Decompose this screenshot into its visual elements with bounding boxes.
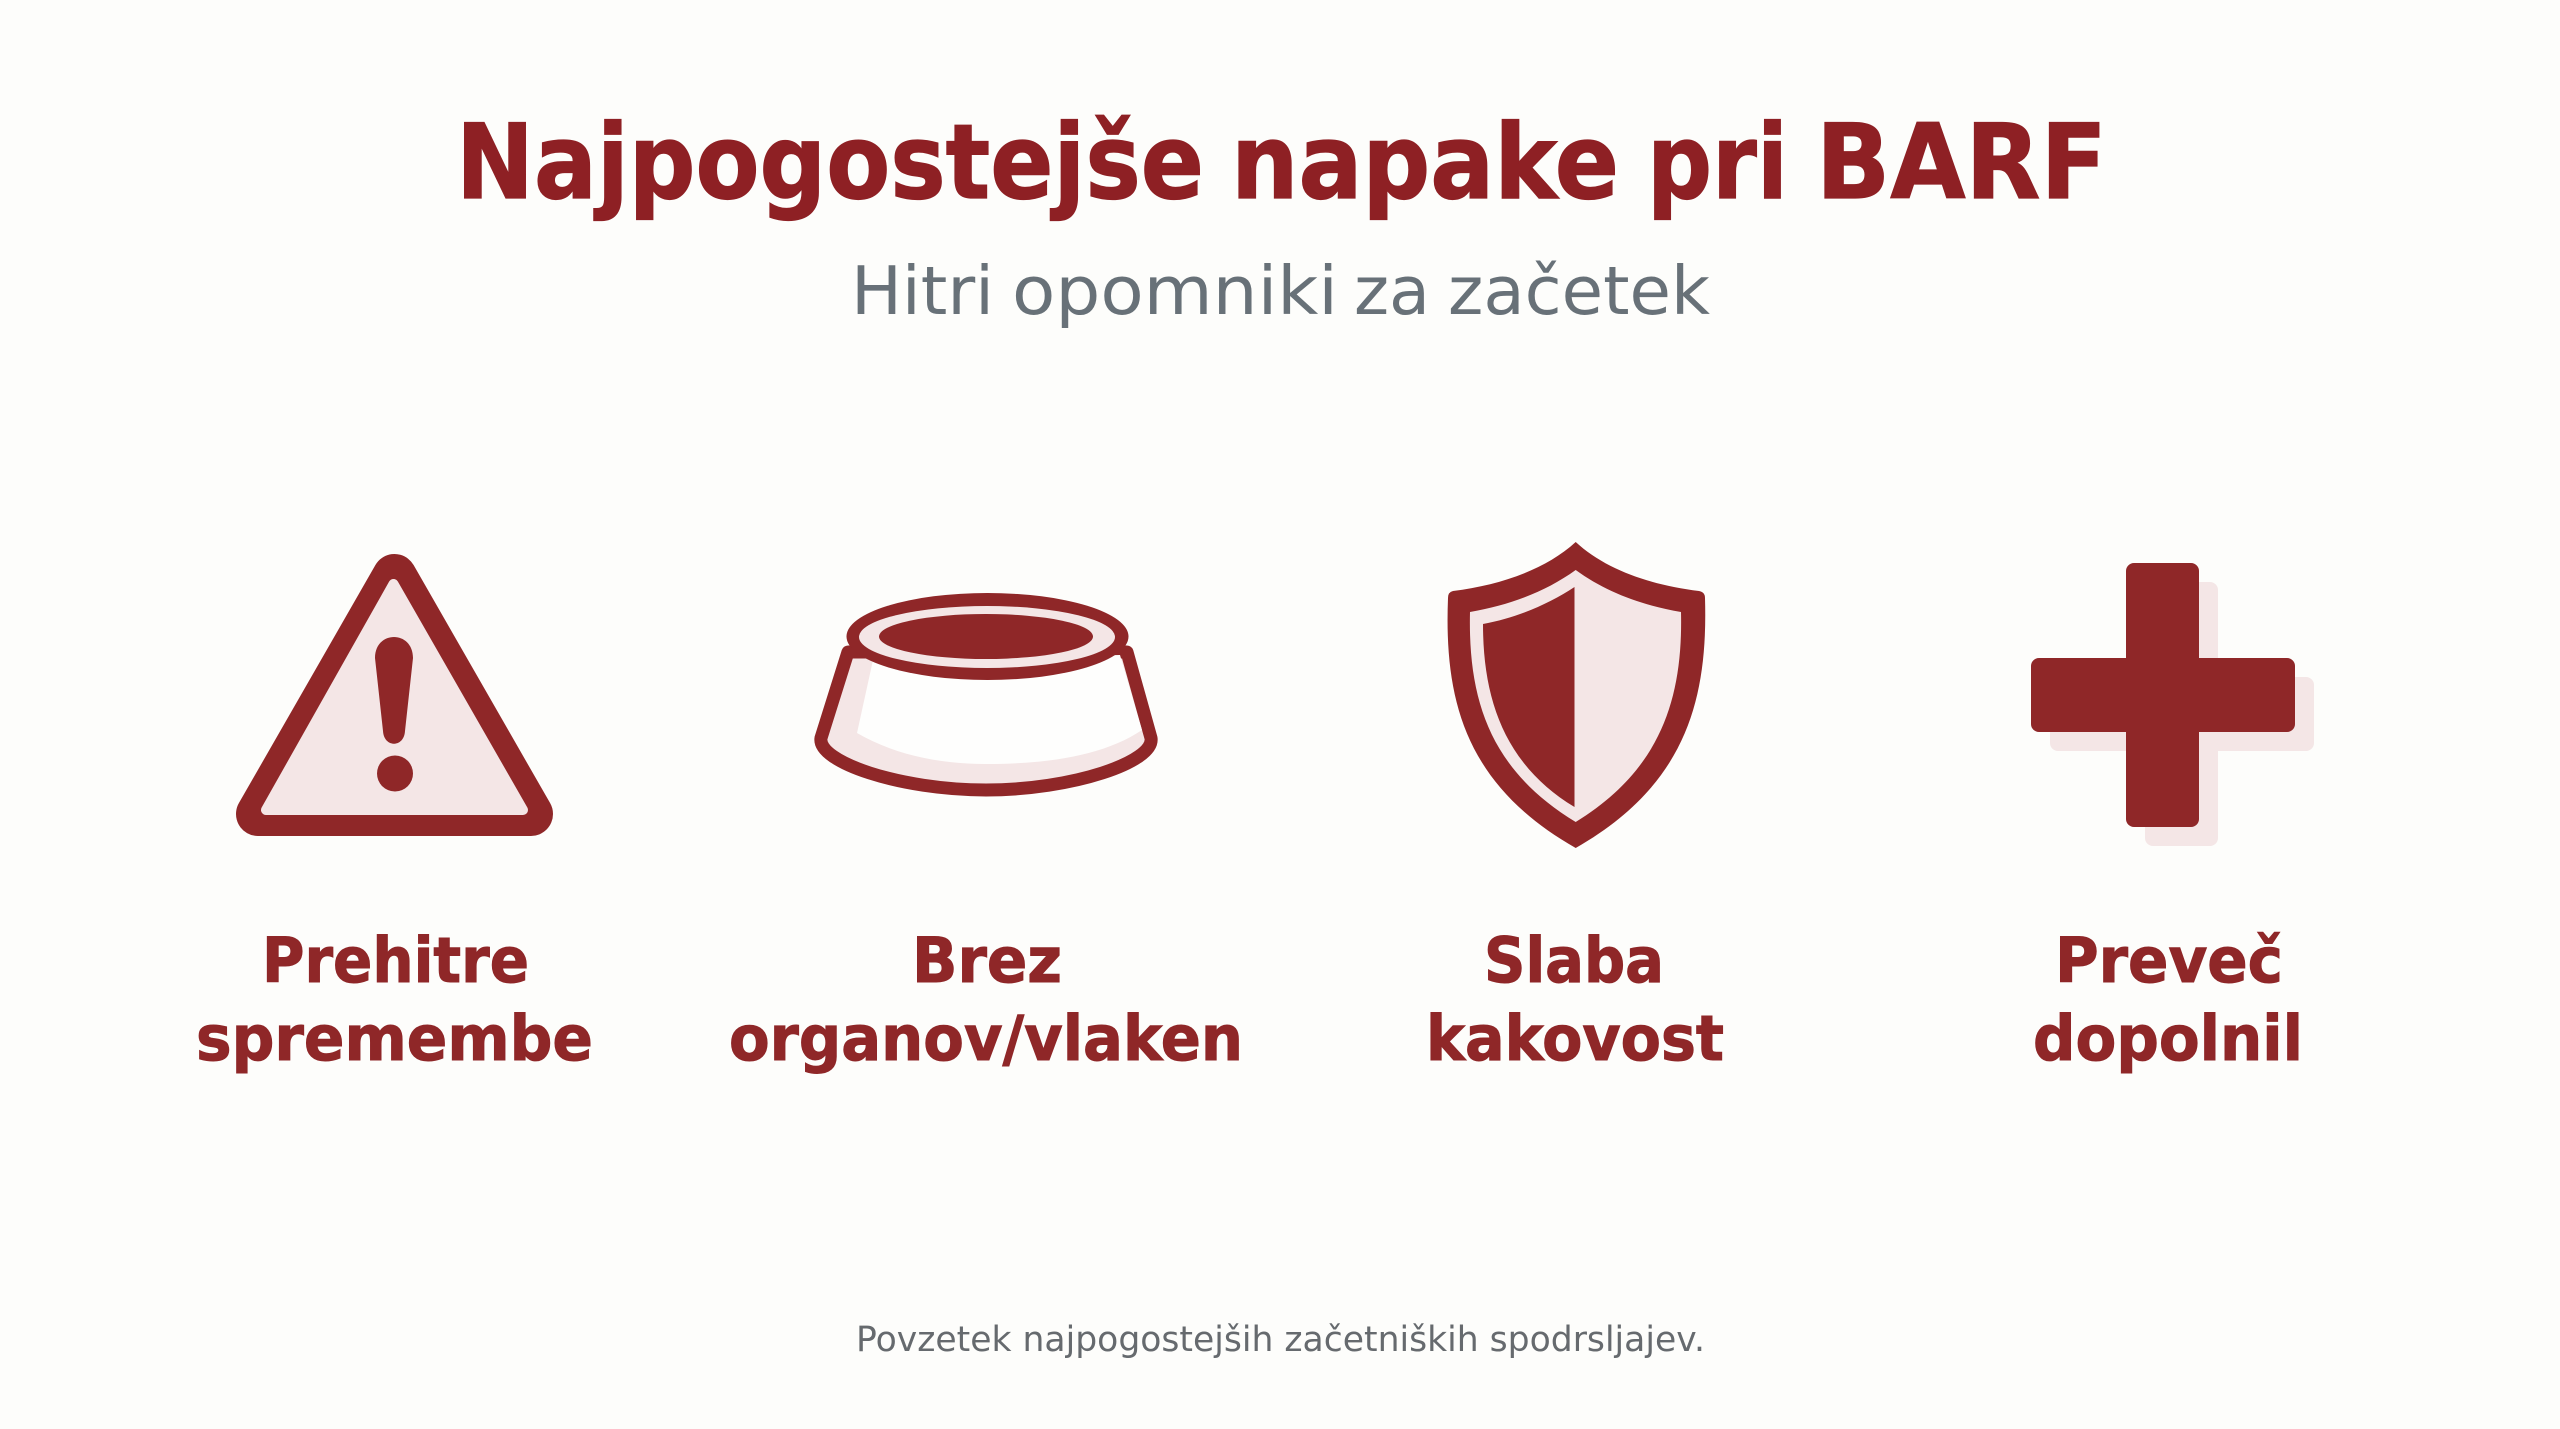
label: Slaba kakovost: kakovost <box>1426 1002 1724 1075</box>
subtitle: za <box>1354 252 1430 330</box>
label: Slaba kakovost: Slaba <box>1484 924 1664 997</box>
label: Brez organov/vlaken: Brez <box>912 924 1062 997</box>
subtitle: Hitri <box>851 252 994 330</box>
icon: warning triangle <box>258 576 531 814</box>
column: poor quality <box>1426 542 1724 1075</box>
title: napake <box>1231 103 1619 223</box>
column: no organs or fibre <box>729 593 1243 1075</box>
title <box>456 103 2107 223</box>
subtitle: začetek <box>1448 252 1710 330</box>
icon: medical cross <box>2031 563 2314 846</box>
icon: food bowl <box>821 593 1151 790</box>
label: Brez organov/vlaken: organov/vlaken <box>729 1002 1243 1075</box>
subtitle: opomniki <box>1012 252 1338 330</box>
label: Prehitre spremembe: Prehitre <box>262 924 529 997</box>
icon: shield <box>1448 542 1705 848</box>
label: Prehitre spremembe <box>196 924 593 1075</box>
label: Preveč dopolnil: dopolnil <box>2033 1002 2303 1075</box>
title: BARF <box>1816 103 2107 223</box>
label: Brez organov/vlaken <box>729 924 1243 1075</box>
subtitle <box>851 252 1710 330</box>
title: Najpogostejše <box>456 103 1204 223</box>
label: Preveč dopolnil <box>2033 924 2303 1075</box>
footer note: Povzetek najpogostejših začetniških spodrsljajev. <box>856 1320 1705 1360</box>
column: too many supplements <box>2031 563 2314 1075</box>
label: Preveč dopolnil: Preveč <box>2055 924 2283 997</box>
column: sudden changes <box>196 576 593 1075</box>
label: Slaba kakovost <box>1426 924 1724 1075</box>
label: Prehitre spremembe: spremembe <box>196 1002 593 1075</box>
title: pri <box>1647 103 1788 223</box>
